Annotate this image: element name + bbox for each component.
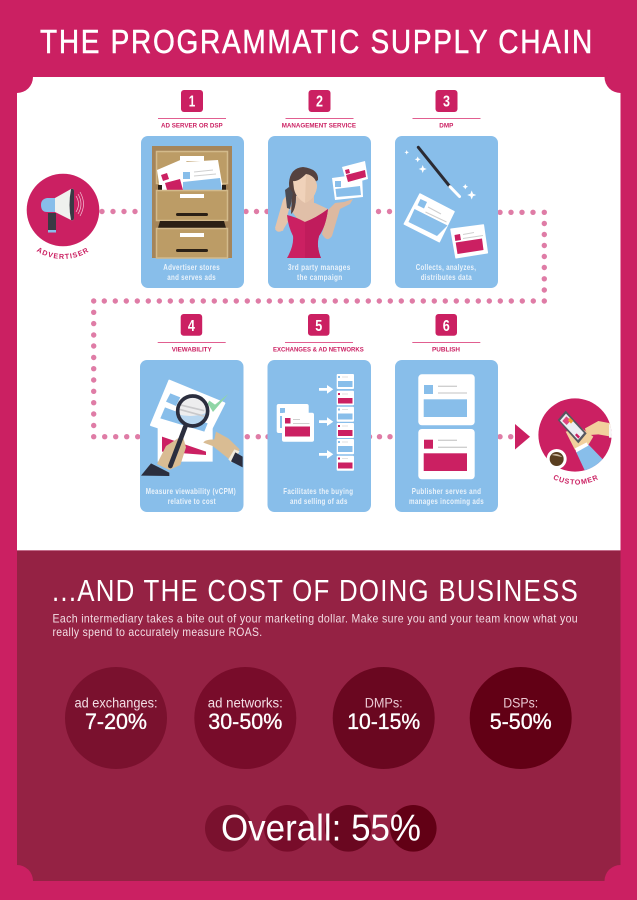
- step 1 header: AD SERVER OR DSP: [161, 122, 223, 129]
- icon: magic wand and ads: [404, 147, 487, 258]
- icon: advertiser megaphone: [27, 174, 99, 246]
- icon: pink ad: [418, 429, 475, 479]
- caption: manages incoming ads: [409, 497, 484, 506]
- step 6 header: [412, 314, 480, 354]
- icon: blue ad: [418, 374, 475, 425]
- card 1: ad server: [141, 136, 244, 288]
- caption: and selling of ads: [290, 497, 348, 506]
- caption: distributes data: [421, 273, 472, 282]
- step 5 header: [273, 314, 364, 354]
- step 6 header: PUBLISH: [432, 347, 460, 354]
- step 3 header: DMP: [439, 122, 454, 129]
- stat: ad networks: [194, 667, 296, 769]
- step 4 header: [158, 314, 226, 354]
- step 1 header: 1: [189, 94, 196, 110]
- step 5 header: 5: [315, 318, 323, 335]
- panel: supply chain: [17, 77, 620, 550]
- step 3 header: [412, 90, 480, 129]
- icon: woman on phone with ads: [275, 161, 368, 258]
- icon: filing cabinet: [152, 146, 232, 258]
- caption: Publisher serves and: [412, 487, 481, 496]
- stat: DSPs: DSPs:: [503, 696, 538, 711]
- stat: ad exchanges: 7-20%: [85, 709, 147, 734]
- step 6 header: 6: [443, 318, 450, 335]
- caption: 3rd party manages: [288, 263, 351, 272]
- card 6: publish: [395, 360, 498, 512]
- stat: ad networks: 30-50%: [208, 709, 282, 734]
- caption: Collects, analyzes,: [416, 263, 476, 272]
- stat: DMPs: [333, 667, 435, 769]
- card 4: viewability: [140, 360, 244, 512]
- intro text: Each intermediary takes a bite out of your marketing dollar. Make sure you and your team know what you: [52, 612, 578, 626]
- caption: Measure viewability (vCPM): [146, 487, 236, 496]
- icon: magnifier and hands: [141, 381, 243, 476]
- card 2: management service: [268, 136, 371, 288]
- card 5: exchanges: [268, 360, 371, 512]
- panel: cost of doing business: [1, 550, 636, 897]
- caption: relative to cost: [168, 497, 216, 506]
- card 3: dmp: [395, 136, 498, 288]
- stat: DMPs: 10-15%: [347, 709, 420, 734]
- step 2 header: MANAGEMENT SERVICE: [282, 122, 357, 129]
- caption: and serves ads: [167, 273, 216, 282]
- step 4 header: 4: [188, 318, 195, 335]
- stat: ad exchanges: ad exchanges:: [74, 696, 158, 711]
- dotted path: [91, 209, 547, 439]
- advertiser label: ADVERTISER: [36, 248, 89, 259]
- step 1 header: [158, 90, 226, 129]
- caption: the campaign: [297, 273, 342, 282]
- step 5 header: EXCHANGES & AD NETWORKS: [273, 347, 364, 354]
- icon: ads distributed by arrows: [277, 374, 354, 471]
- intro text: really spend to accurately measure ROAS.: [52, 625, 262, 639]
- step 3 header: 3: [443, 94, 450, 110]
- icon: customer with phone: [538, 398, 612, 472]
- caption: Advertiser stores: [163, 263, 220, 272]
- stat: ad exchanges: [65, 667, 167, 769]
- step 4 header: VIEWABILITY: [172, 347, 212, 354]
- customer label: CUSTOMER: [554, 475, 598, 485]
- caption: Facilitates the buying: [283, 487, 353, 496]
- stat: DSPs: 5-50%: [490, 709, 552, 734]
- stat: DSPs: [470, 667, 572, 769]
- step 2 header: [282, 90, 357, 129]
- overall stat: Overall: 55%: [221, 808, 421, 849]
- arrow to customer: [515, 424, 530, 450]
- stat: ad networks: ad networks:: [208, 696, 283, 711]
- step 2 header: 2: [316, 94, 323, 110]
- stat: DMPs: DMPs:: [365, 696, 403, 711]
